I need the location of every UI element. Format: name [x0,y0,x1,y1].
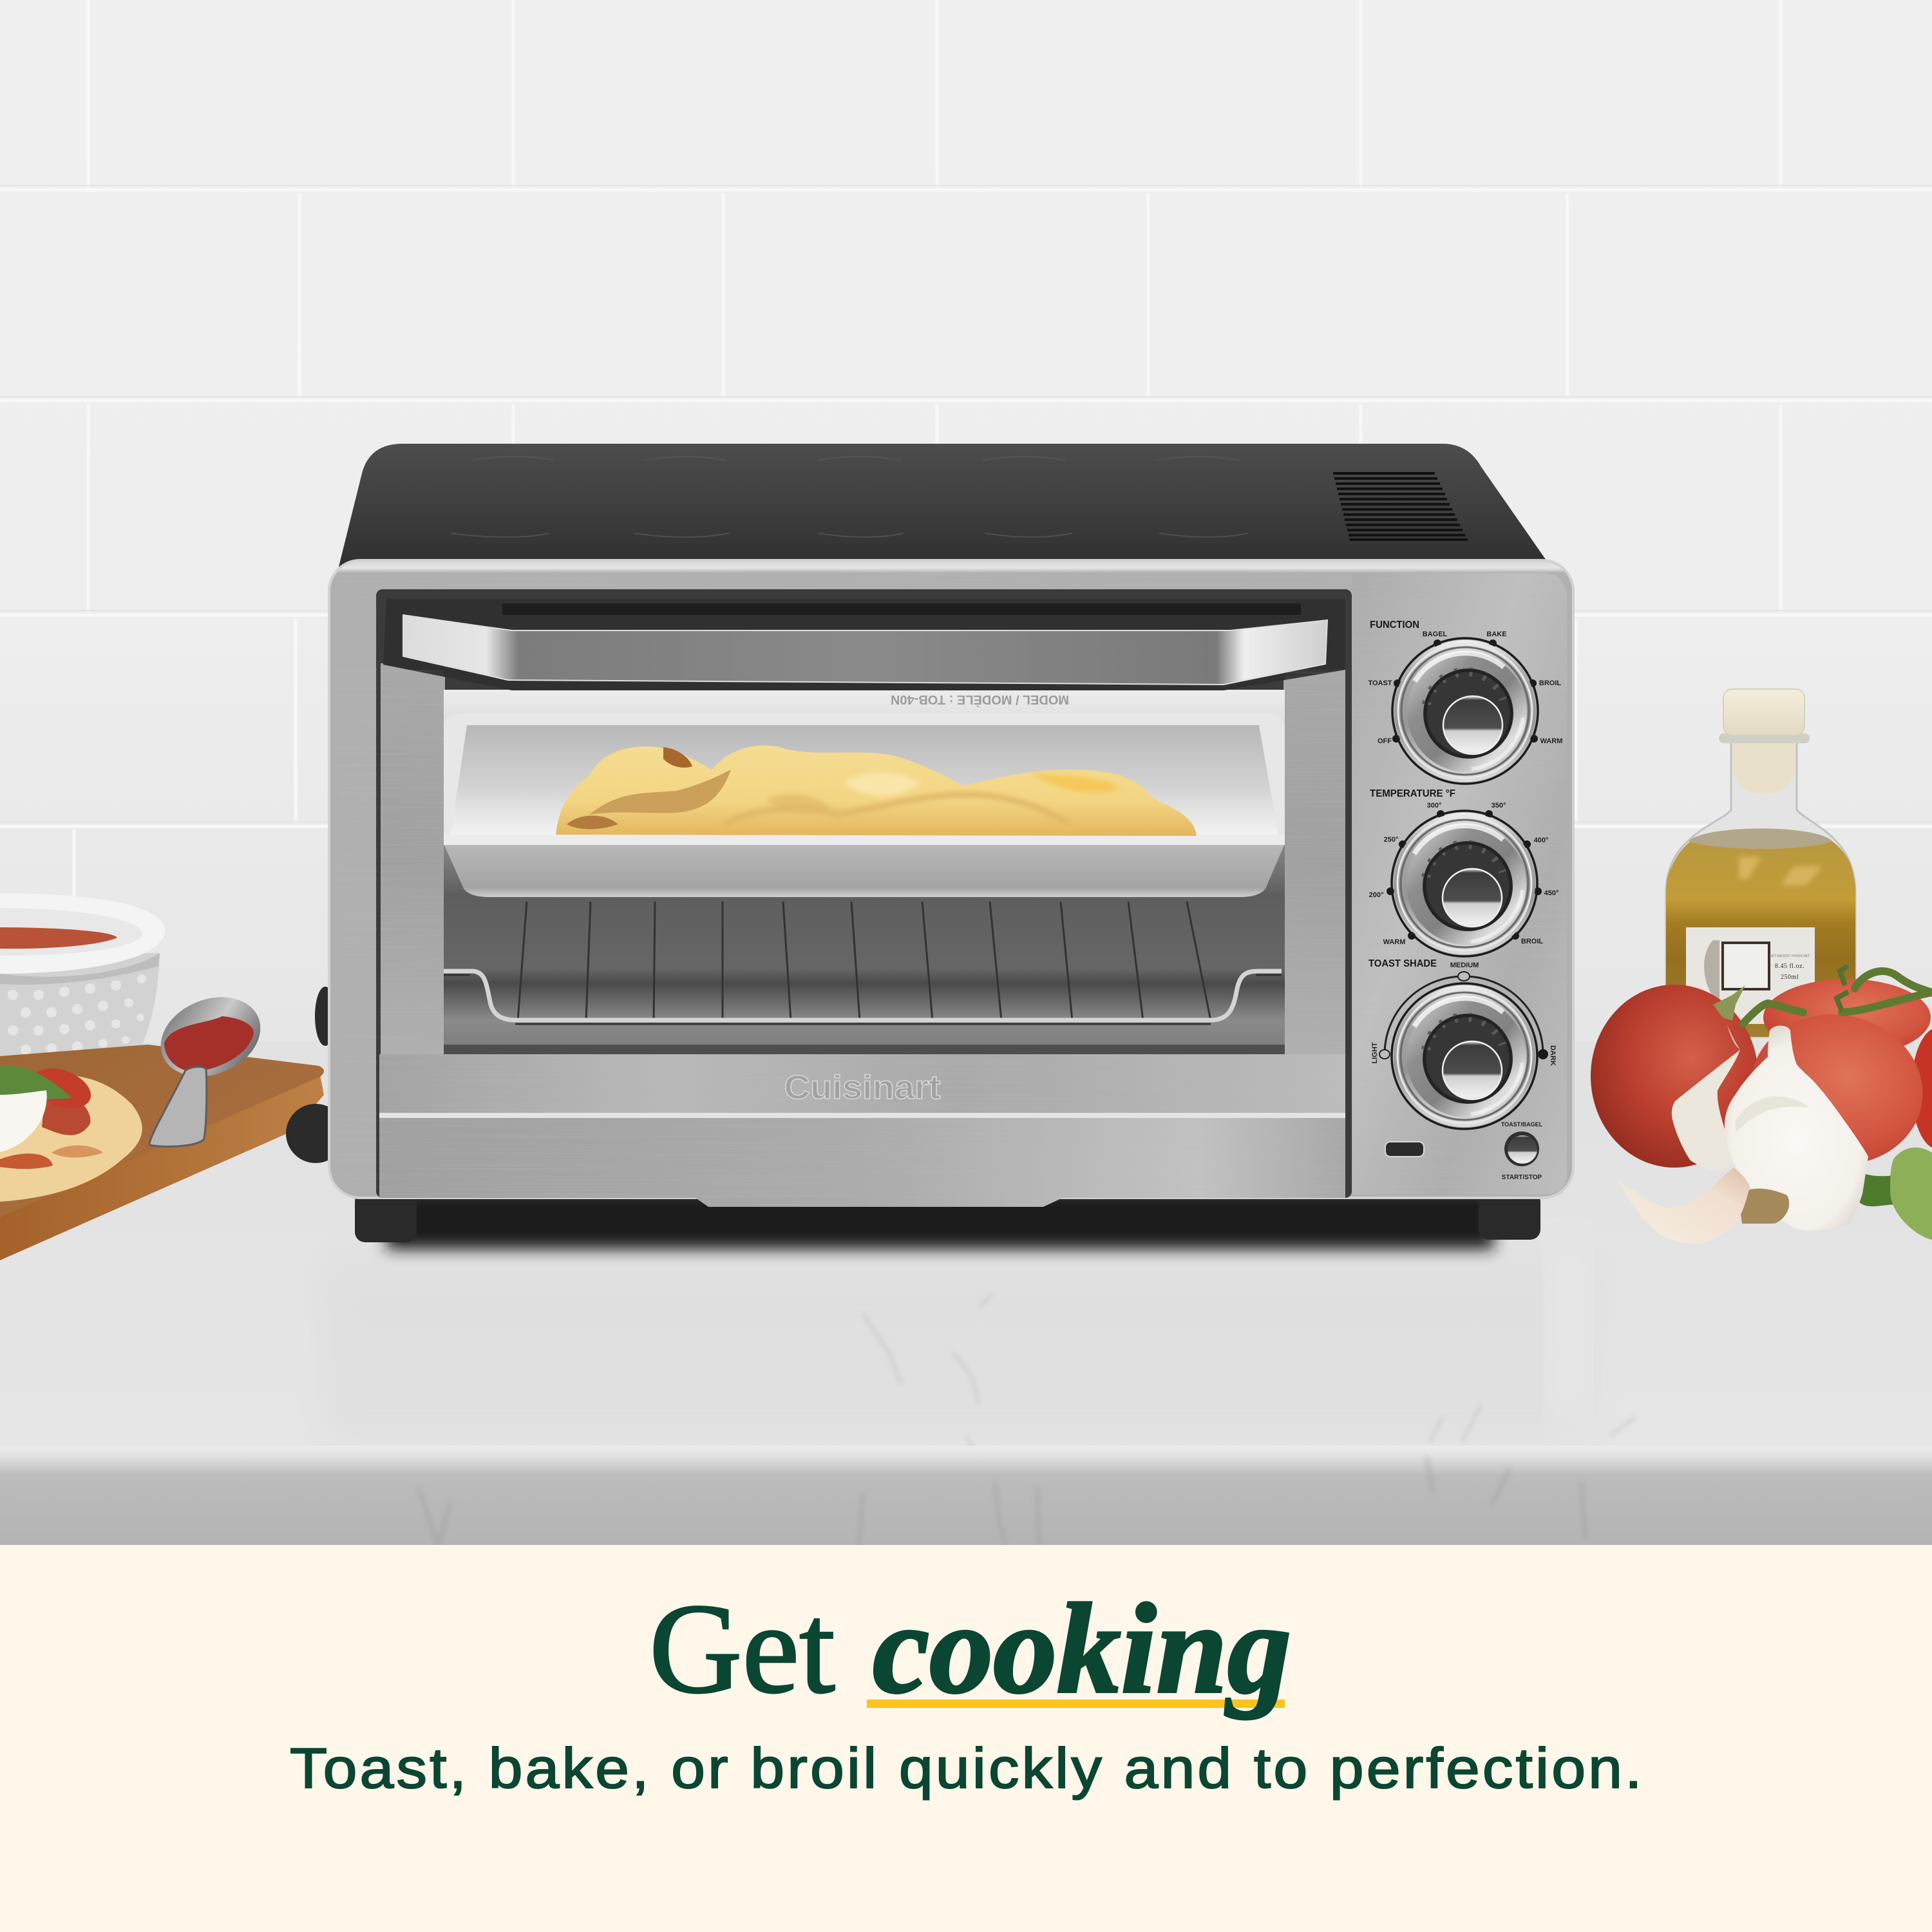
lower door strip with logo: Cuisinart [784,1069,940,1106]
temperature dial [1369,788,1558,956]
control panel [329,560,1573,1198]
temperature dial: 350° [1492,802,1506,810]
toaster oven [286,444,1573,1249]
left and right door stiles [381,663,1345,1056]
function dial: WARM [1540,737,1562,745]
indicator light [1385,1142,1424,1157]
temperature dial: 400° [1534,837,1548,844]
door recess [376,589,1352,1198]
brushed steel texture [376,596,1345,1188]
heading: cooking [873,1578,1291,1720]
oven window: MODEL / MODÈLE : TOB-40N [891,692,1069,707]
shadow under oven [386,1188,1494,1249]
chrome door handle [403,615,1327,685]
olive oil bottle: 250ml [1781,974,1799,981]
subheading: Toast, bake, or broil quickly and to perfection. [290,1737,1642,1800]
toast shade dial: DARK [1549,1045,1557,1066]
temperature dial: 300° [1427,802,1441,810]
start stop button [1501,1121,1543,1181]
door handle dark surround [383,599,1345,690]
panel: caption background [0,1545,1932,1932]
function dial [1368,620,1562,784]
door bottom strip [379,1113,1345,1207]
function dial: BROIL [1539,679,1561,687]
temperature dial: TEMPERATURE °F [1370,788,1455,799]
olive oil bottle: NET WEIGHT / POIDS NET [1770,954,1810,958]
toast shade dial: LIGHT [1371,1042,1379,1064]
garlic bulb and cloves [1616,1024,1868,1244]
wire rack [518,902,1211,1021]
temperature dial: 200° [1369,891,1383,899]
temperature dial: 450° [1544,889,1558,897]
function dial: BAKE [1486,630,1507,638]
rear side knobs [286,987,345,1163]
spoon with sauce [149,983,272,1146]
dark top of oven [339,444,1555,573]
function dial: BAGEL [1423,630,1448,638]
marble counter top [0,1041,1932,1462]
vent slits [1333,473,1468,540]
function dial: TOAST [1368,679,1392,687]
wall of white subway tiles [0,0,1932,1043]
heading [649,1578,1291,1720]
flatbread pizza with mozzarella and basil [0,1061,142,1202]
temperature dial: 250° [1384,836,1398,844]
marble counter front edge [0,1446,1932,1546]
heading: Get [649,1578,835,1720]
toast shade dial: TOAST SHADE [1368,958,1437,969]
bowl of tomato sauce [0,893,165,1079]
heading underline [867,1700,1285,1708]
basil leaves [1858,1148,1932,1240]
feet [355,1191,1540,1242]
start stop button: TOAST/BAGEL [1501,1121,1543,1128]
olive oil bottle: 8.45 fl.oz. [1775,963,1804,970]
lower door strip with logo [379,1054,1345,1113]
toast shade dial: MEDIUM [1450,961,1479,969]
baking tray [444,714,1285,897]
rack front rail [444,971,1282,1020]
tomatoes on the vine [1591,966,1932,1179]
function dial: OFF [1378,737,1392,745]
golden flatbread [556,746,1197,836]
start stop button: START/STOP [1502,1174,1542,1181]
temperature dial: WARM [1383,938,1405,946]
function dial: FUNCTION [1370,620,1419,630]
toast shade dial [1368,958,1557,1129]
wooden cutting board [0,1045,324,1260]
olive oil bottle [1666,689,1855,1037]
temperature dial: BROIL [1521,938,1543,945]
stainless front frame [329,560,1573,1198]
oven window [444,690,1285,1057]
